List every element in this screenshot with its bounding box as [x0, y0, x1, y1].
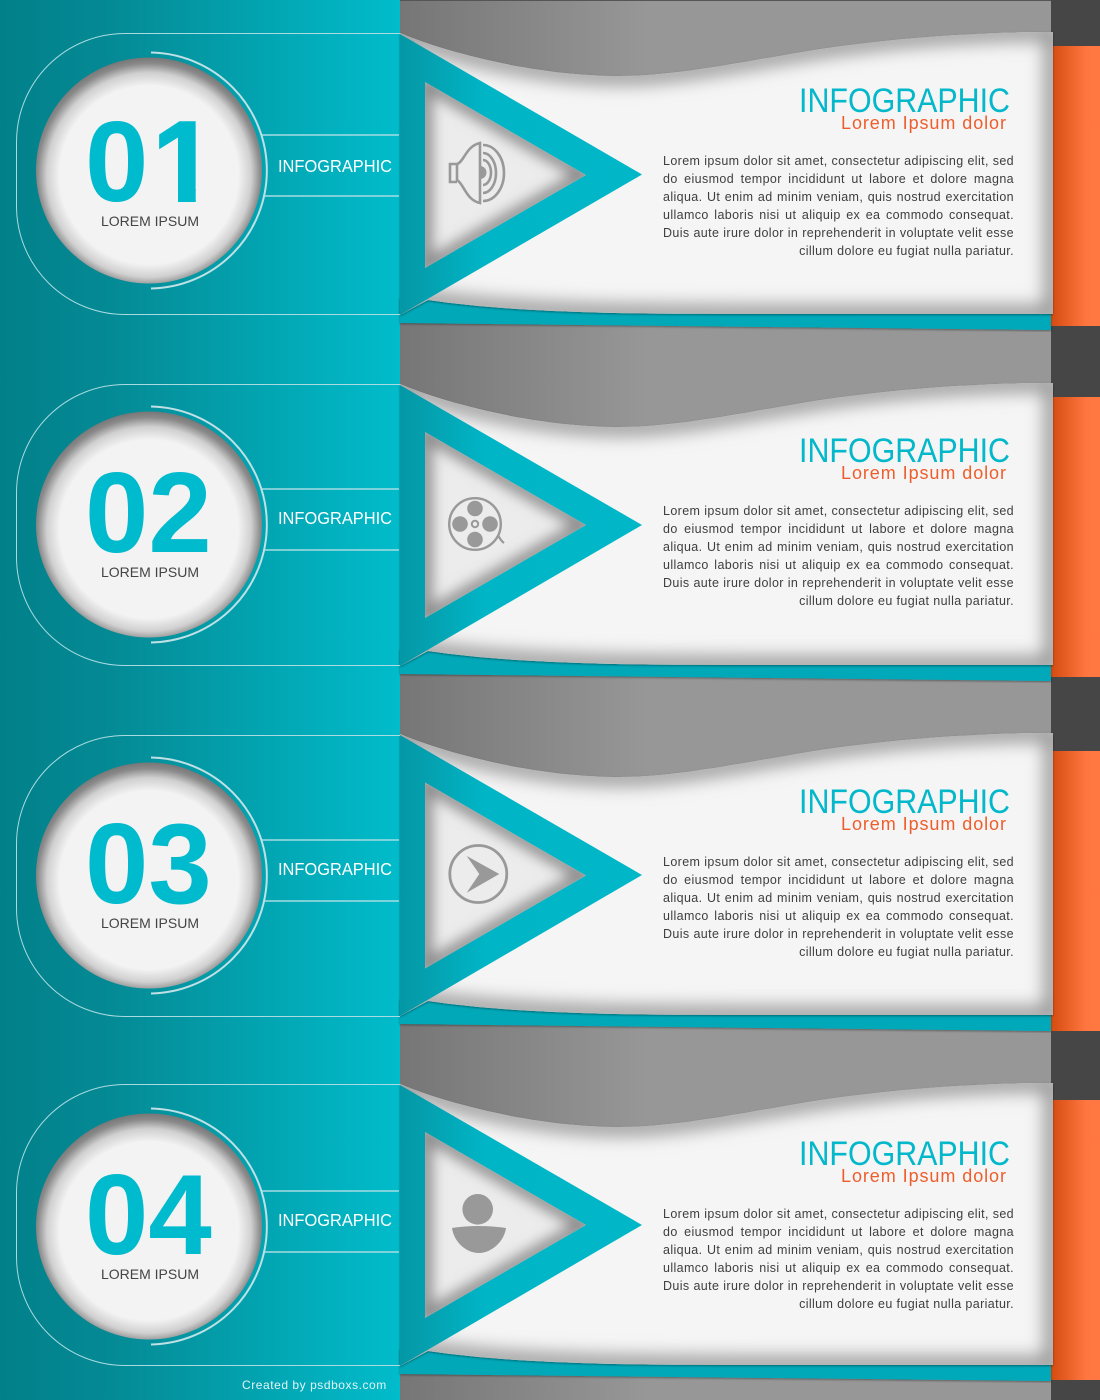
body text: ullamco laboris nisi ut aliquip ex ea commodo consequat.: [663, 208, 1014, 222]
heading: INFOGRAPHIC: [799, 1135, 1010, 1173]
body text: ullamco laboris nisi ut aliquip ex ea commodo consequat.: [663, 909, 1014, 923]
circle arc: [151, 1108, 267, 1344]
number: 03: [85, 801, 212, 928]
subheading: Lorem Ipsum dolor: [841, 113, 1006, 133]
body text: ullamco laboris nisi ut aliquip ex ea commodo consequat.: [663, 558, 1014, 572]
body text: [663, 1205, 1014, 1315]
number circle: [36, 58, 262, 284]
orange side tab: [1051, 46, 1100, 326]
panel: step 1: [16, 32, 1100, 330]
number: 01: [85, 99, 216, 226]
body text: cillum dolore eu fugiat nulla pariatur.: [799, 1297, 1014, 1311]
side label: INFOGRAPHIC: [278, 156, 392, 176]
inner triangle: [425, 1132, 586, 1318]
body text: Duis aute irure dolor in reprehenderit in voluptate velit esse: [663, 1279, 1014, 1293]
body text: aliqua. Ut enim ad minim veniam, quis nostrud exercitation: [663, 1243, 1014, 1257]
body text: Duis aute irure dolor in reprehenderit in voluptate velit esse: [663, 576, 1014, 590]
orange side tab: [1051, 1100, 1100, 1380]
side label: INFOGRAPHIC: [278, 859, 392, 879]
body text: do eiusmod tempor incididunt ut labore et dolore magna: [663, 522, 1014, 536]
icon: speaker: [450, 143, 504, 203]
icon: person: [452, 1194, 506, 1253]
body text: do eiusmod tempor incididunt ut labore et dolore magna: [663, 873, 1014, 887]
inner triangle: [425, 82, 586, 268]
white card: [400, 383, 1053, 666]
side label: INFOGRAPHIC: [278, 508, 392, 528]
teal triangle: [400, 1085, 642, 1366]
number circle: [36, 762, 262, 988]
number circle: [36, 412, 262, 638]
panel: gray background: [400, 0, 1051, 1400]
number circle: [36, 1114, 262, 1340]
circle arc: [151, 406, 267, 642]
circle caption: LOREM IPSUM: [101, 1266, 199, 1282]
panel: step 2: [16, 383, 1100, 681]
credit line: Created by psdboxs.com: [242, 1378, 387, 1392]
orange side tab: [1051, 751, 1100, 1031]
heading: INFOGRAPHIC: [799, 82, 1010, 120]
rounded frame outline: [16, 1084, 400, 1366]
white card: [400, 1083, 1053, 1366]
white card: [400, 733, 1053, 1016]
body text: do eiusmod tempor incididunt ut labore et dolore magna: [663, 1225, 1014, 1239]
side label: INFOGRAPHIC: [278, 1210, 392, 1230]
subheading: Lorem Ipsum dolor: [841, 463, 1006, 483]
teal triangle: [400, 385, 642, 666]
body text: Lorem ipsum dolor sit amet, consectetur adipiscing elit, sed: [663, 154, 1014, 168]
teal ribbon: [400, 1349, 1051, 1381]
connector lines: [262, 1191, 399, 1252]
connector lines: [262, 489, 399, 550]
number: 02: [85, 450, 212, 577]
number: 04: [85, 1152, 212, 1279]
rounded frame outline: [16, 34, 400, 314]
body text: aliqua. Ut enim ad minim veniam, quis nostrud exercitation: [663, 540, 1014, 554]
body text: [663, 152, 1014, 262]
inner triangle: [425, 432, 586, 618]
teal ribbon: [400, 649, 1051, 681]
body text: [663, 853, 1014, 963]
body text: do eiusmod tempor incididunt ut labore et dolore magna: [663, 172, 1014, 186]
orange side tab: [1051, 397, 1100, 677]
circle caption: LOREM IPSUM: [101, 213, 199, 229]
teal ribbon: [400, 298, 1051, 330]
body text: Duis aute irure dolor in reprehenderit in voluptate velit esse: [663, 226, 1014, 240]
connector lines: [262, 840, 399, 901]
heading: INFOGRAPHIC: [799, 432, 1010, 470]
circle caption: LOREM IPSUM: [101, 564, 199, 580]
rounded frame outline: [16, 736, 400, 1016]
body text: Duis aute irure dolor in reprehenderit in voluptate velit esse: [663, 927, 1014, 941]
teal triangle: [400, 34, 642, 315]
circle caption: LOREM IPSUM: [101, 915, 199, 931]
connector lines: [262, 135, 399, 196]
body text: ullamco laboris nisi ut aliquip ex ea commodo consequat.: [663, 1261, 1014, 1275]
white card: [400, 32, 1053, 315]
teal triangle: [400, 735, 642, 1016]
body text: cillum dolore eu fugiat nulla pariatur.: [799, 244, 1014, 258]
body text: Lorem ipsum dolor sit amet, consectetur adipiscing elit, sed: [663, 855, 1014, 869]
body text: aliqua. Ut enim ad minim veniam, quis nostrud exercitation: [663, 190, 1014, 204]
body text: Lorem ipsum dolor sit amet, consectetur adipiscing elit, sed: [663, 1207, 1014, 1221]
subheading: Lorem Ipsum dolor: [841, 1166, 1006, 1186]
panel: step 3: [16, 733, 1100, 1031]
body text: aliqua. Ut enim ad minim veniam, quis nostrud exercitation: [663, 891, 1014, 905]
body text: Lorem ipsum dolor sit amet, consectetur adipiscing elit, sed: [663, 504, 1014, 518]
icon: play arrow: [450, 846, 507, 902]
heading: INFOGRAPHIC: [799, 783, 1010, 821]
circle arc: [151, 52, 267, 288]
teal ribbon: [400, 999, 1051, 1031]
circle arc: [151, 758, 267, 994]
body text: [663, 502, 1014, 612]
rounded frame outline: [16, 384, 400, 666]
subheading: Lorem Ipsum dolor: [841, 814, 1006, 834]
inner triangle: [425, 782, 586, 968]
panel: left teal column: [0, 0, 400, 1400]
body text: cillum dolore eu fugiat nulla pariatur.: [799, 945, 1014, 959]
body text: cillum dolore eu fugiat nulla pariatur.: [799, 594, 1014, 608]
panel: step 4: [16, 1083, 1100, 1381]
icon: film reel: [449, 498, 504, 550]
